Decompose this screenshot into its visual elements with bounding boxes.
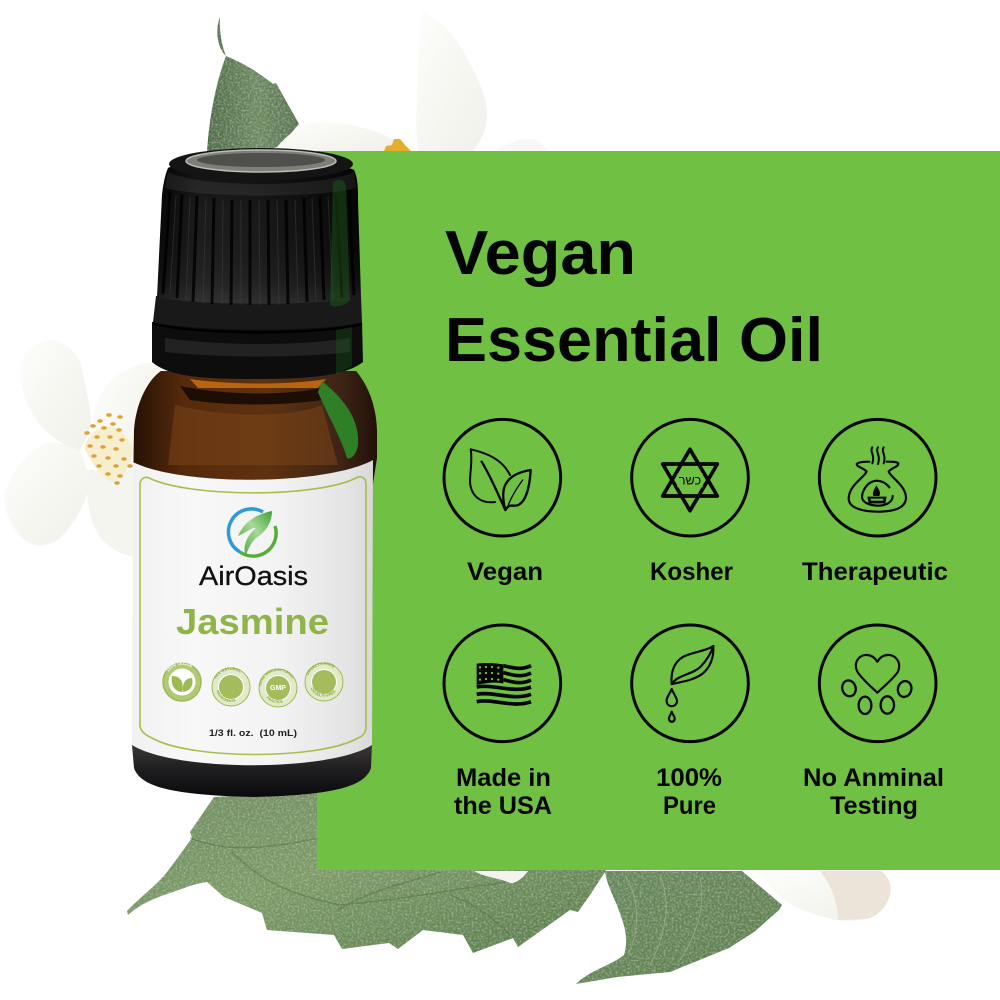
lower petal: [84, 470, 140, 558]
title: [445, 219, 823, 375]
icon: oil burner: [819, 419, 936, 536]
badge: all natural: INGREDIENTS: [216, 690, 236, 702]
label: Kosher: [650, 558, 733, 586]
label: Vegan: [467, 558, 543, 586]
right bottom leaf: [576, 871, 782, 984]
cap ribbed body: [157, 164, 361, 304]
feature: vegan: [444, 419, 561, 586]
dark neck shadow: [180, 386, 330, 404]
icon: leaf with drops: [632, 625, 748, 742]
badge: cruelty free: CRUELTY-FREE: [306, 662, 335, 676]
white label: [132, 460, 373, 765]
logo leaf: [238, 511, 272, 556]
feature: no animal testing: Testing: [830, 792, 918, 820]
green reflection on cap: [330, 180, 350, 306]
top small petal: [494, 139, 548, 152]
feature: kosher: [632, 419, 748, 586]
cap shading: [157, 164, 361, 304]
badge: vegan: [162, 662, 202, 702]
lower left petal: [4, 443, 89, 545]
title: Vegan: [445, 219, 636, 288]
bottom right jasmine petal: [757, 871, 891, 921]
label: 100%: [656, 764, 722, 792]
top stamens: [384, 139, 411, 151]
logo ring: [228, 509, 263, 552]
icon: star of David: כשר: [679, 474, 701, 488]
product bottle: [132, 148, 377, 797]
volume text: 1/3 fl. oz. (10 mL): [209, 728, 297, 739]
feature: 100% pure: Pure: [663, 792, 716, 820]
cap ribs: [163, 190, 354, 305]
badge: cruelty free: CRUELTY-FREE: [310, 688, 336, 697]
top jasmine petal behind panel: [277, 122, 400, 152]
title: Essential Oil: [445, 306, 823, 375]
label: Made in: [456, 764, 551, 792]
panel: green background: [317, 151, 1000, 870]
product name: Jasmine: [176, 601, 329, 642]
feature: made in the USA: the USA: [454, 792, 552, 820]
feature: therapeutic: [802, 419, 948, 586]
filaments: [84, 426, 133, 482]
stamens: [84, 413, 133, 485]
bottle glass: [133, 371, 377, 490]
badge: GMP: [258, 668, 298, 708]
icon: american flag: [444, 625, 561, 742]
icon: leaves: [444, 419, 561, 536]
label: No Anminal: [803, 764, 944, 792]
upper left petal: [20, 340, 91, 451]
cap collar upper: [153, 296, 362, 330]
badge: cruelty free: [304, 662, 344, 702]
label: Therapeutic: [802, 558, 948, 586]
badge: GMP: PRACTICE: [266, 696, 283, 703]
feature: no animal testing: [803, 625, 944, 820]
badge: GMP: GOOD MANUFACTURING: [258, 668, 294, 686]
badge: GMP: GMP: [270, 685, 286, 692]
badge: all natural: [212, 667, 250, 706]
amber oil glow: [190, 379, 326, 388]
back petal: [92, 362, 162, 470]
cap top sheen: [165, 172, 356, 196]
logo: Air Oasis: AirOasis: [199, 561, 308, 591]
badge: vegan: 100% VEGAN: [166, 662, 192, 672]
large bottom leaf: [127, 790, 610, 953]
green reflection: [318, 381, 358, 458]
bottle base: [132, 745, 372, 797]
petal fold: [820, 871, 891, 920]
logo: Air Oasis: [199, 509, 308, 591]
icon: paw with heart: [819, 625, 936, 742]
brown liquid: [168, 405, 338, 465]
feature: 100% pure: [632, 625, 748, 820]
large leaf veins: [190, 838, 520, 935]
right leaf veins: [625, 875, 702, 965]
cap top metal disc: [169, 148, 353, 180]
collar shine: [165, 338, 350, 356]
feature: made in the USA: [444, 625, 561, 820]
bottom small petal: [474, 871, 528, 883]
collar gap: [154, 324, 362, 332]
cap collar lower: [152, 322, 363, 379]
left jasmine flower: [4, 340, 162, 558]
green reflection on collar: [336, 327, 352, 375]
label border: [140, 477, 366, 754]
top right jasmine petal: [416, 11, 487, 152]
top green leaf: [207, 17, 299, 152]
icon: star of David: [632, 419, 748, 536]
badge: all natural: ALL NATURAL: [214, 667, 240, 679]
